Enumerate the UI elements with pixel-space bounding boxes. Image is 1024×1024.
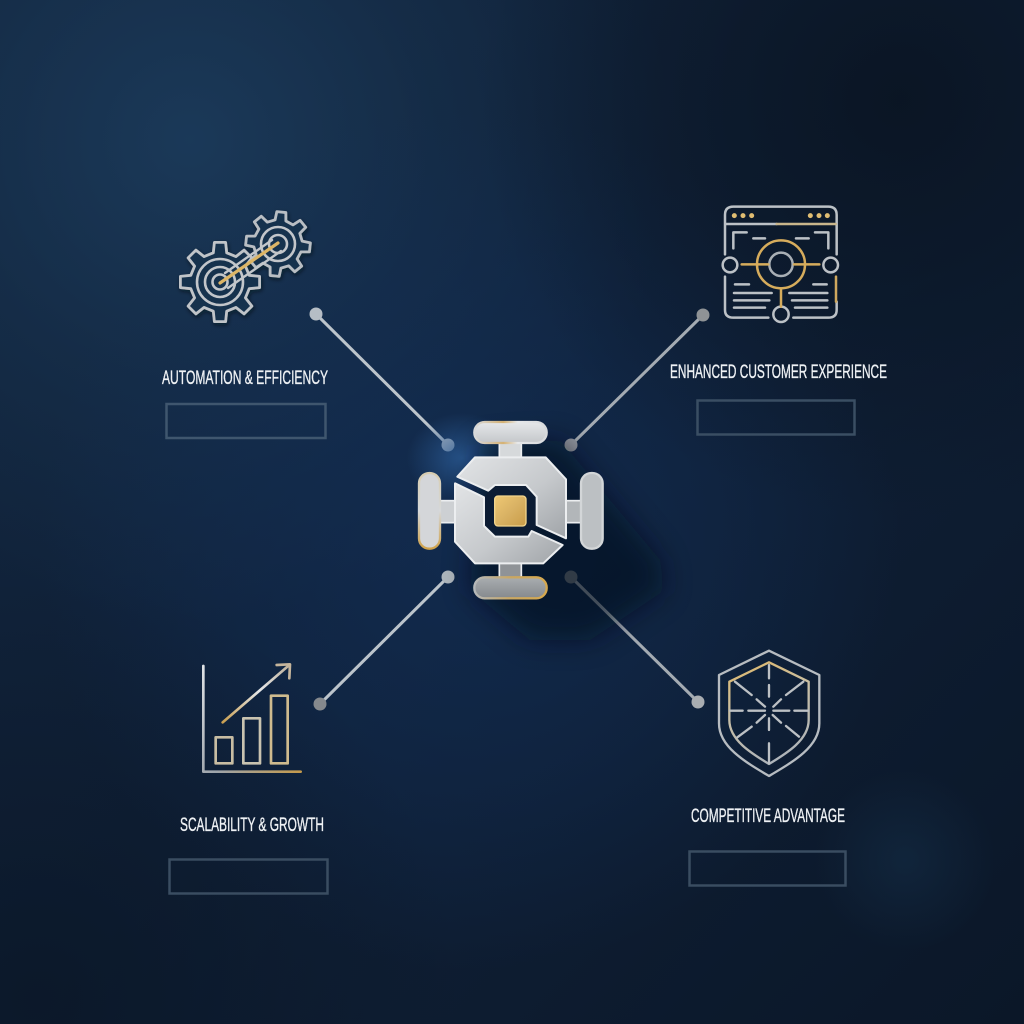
hub upper body	[457, 457, 566, 538]
gear rings	[197, 227, 295, 305]
central hub icon	[407, 413, 665, 640]
hub left pill	[419, 473, 440, 549]
connector: bottom right	[564, 570, 704, 708]
icon: browser interface	[723, 207, 838, 322]
hub top pill	[474, 422, 547, 443]
hub dark core	[484, 485, 537, 536]
hub bottom pill	[474, 577, 547, 598]
label: automation and efficiency: AUTOMATION & EFFICIENCY	[162, 368, 328, 389]
connector: top left	[310, 308, 454, 452]
empty box: scalability	[170, 860, 328, 894]
hub stems	[439, 442, 583, 578]
hub right pill	[581, 473, 603, 549]
icon: gears	[180, 209, 313, 322]
label: enhanced customer experience: ENHANCED CUSTOMER EXPERIENCE	[670, 362, 887, 383]
empty box: customer experience	[698, 400, 854, 434]
gear link	[220, 240, 281, 288]
small gear	[243, 209, 313, 279]
empty box: automation	[166, 404, 326, 438]
large gear	[180, 242, 260, 322]
label: scalability and growth: SCALABILITY & GROWTH	[180, 815, 324, 836]
connector: bottom left	[314, 570, 454, 710]
hub gold chip	[495, 496, 526, 526]
hub lower body	[455, 483, 563, 563]
empty box: competitive advantage	[690, 852, 846, 886]
icon: shield	[719, 651, 819, 776]
icon: growth bar chart	[203, 664, 301, 772]
label: competitive advantage: COMPETITIVE ADVANTAGE	[691, 806, 845, 827]
connector: top right	[564, 308, 710, 452]
